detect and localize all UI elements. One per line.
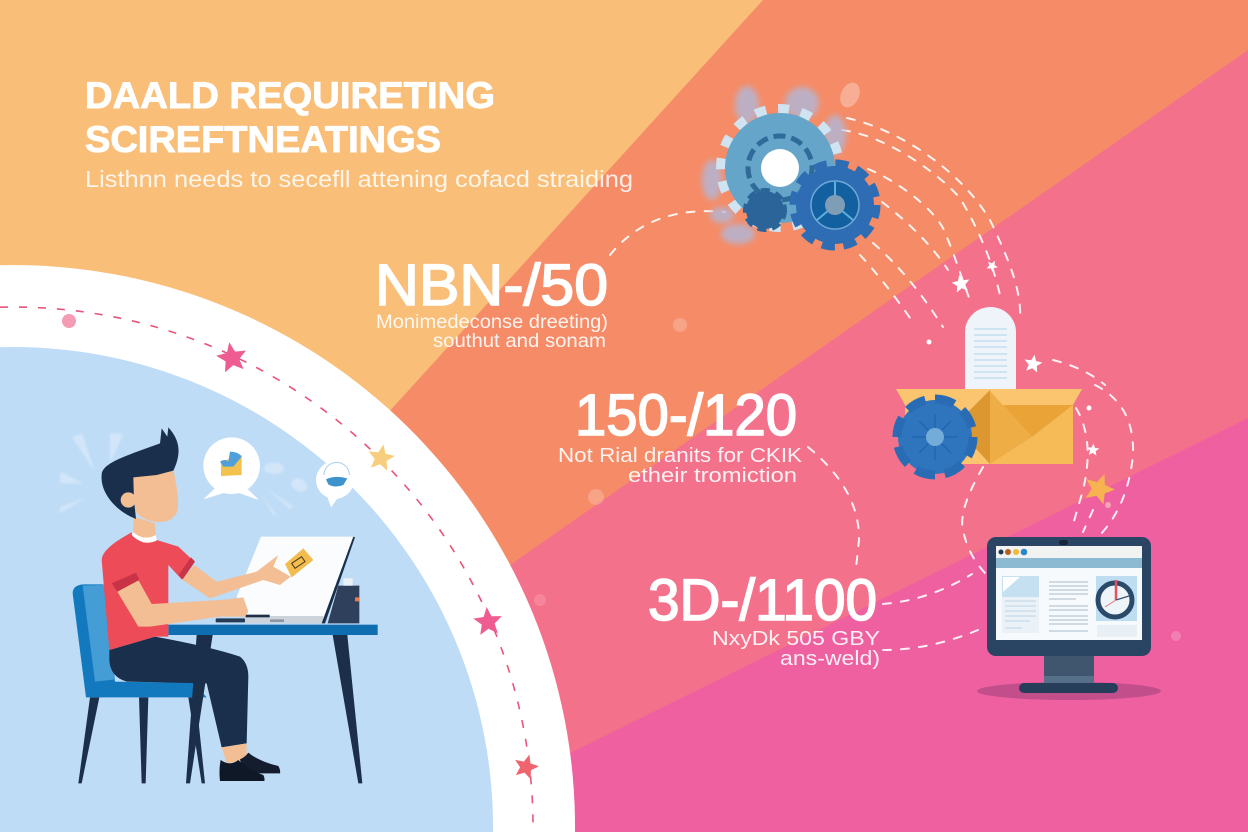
title: DAALD REQUIRETING (85, 75, 495, 116)
stat 1: Monimedeconse dreeting) (376, 312, 608, 333)
dashed orbit with stars (0, 307, 541, 832)
speech bubble 2 (316, 461, 354, 507)
document (965, 307, 1016, 389)
stat 3 (648, 568, 880, 670)
chair (73, 584, 207, 783)
icon: gears (702, 86, 876, 246)
stat 1: NBN-/50 (375, 253, 608, 318)
blue circle panel (0, 347, 493, 832)
stat 2: Not Rial dranits for CKIK (558, 445, 803, 467)
laptop (216, 537, 355, 623)
pen holder (326, 578, 359, 623)
stat 2 (558, 383, 803, 487)
ear (121, 492, 136, 508)
neck (133, 517, 156, 543)
speech bubble 1 (203, 437, 260, 500)
stat 2: 150-/120 (575, 383, 797, 448)
stat 2: etheir tromiction (628, 465, 797, 487)
icon: envelope with document (896, 307, 1082, 475)
torso (102, 532, 194, 650)
sleeve cuffs (112, 557, 195, 592)
title (85, 75, 495, 160)
decorative dots (534, 79, 1181, 641)
stat 3: 3D-/1100 (648, 568, 877, 633)
person at desk (60, 427, 378, 783)
stat 3: ans-weld) (780, 648, 880, 670)
subtitle: Listhnn needs to secefll attening cofacd straiding (85, 166, 633, 192)
blue cog (897, 399, 973, 475)
large blue gear (794, 164, 876, 246)
stat 1 (375, 253, 608, 352)
legs (109, 637, 280, 781)
light accents (60, 433, 310, 515)
arms (117, 555, 291, 627)
white arc panel (0, 265, 575, 832)
clock chart (1096, 576, 1137, 621)
small gear (745, 190, 785, 230)
stars near envelope (926, 258, 1119, 506)
screen (996, 546, 1142, 640)
stat 3: NxyDk 505 GBY (712, 628, 880, 650)
hair (102, 427, 179, 519)
desk (168, 625, 378, 783)
stat 1: southut and sonam (433, 331, 606, 352)
title: SCIREFTNEATINGS (85, 119, 441, 160)
card (285, 548, 313, 577)
dashed connector paths (610, 118, 1133, 650)
face (133, 470, 178, 522)
icon: monitor (977, 537, 1161, 700)
